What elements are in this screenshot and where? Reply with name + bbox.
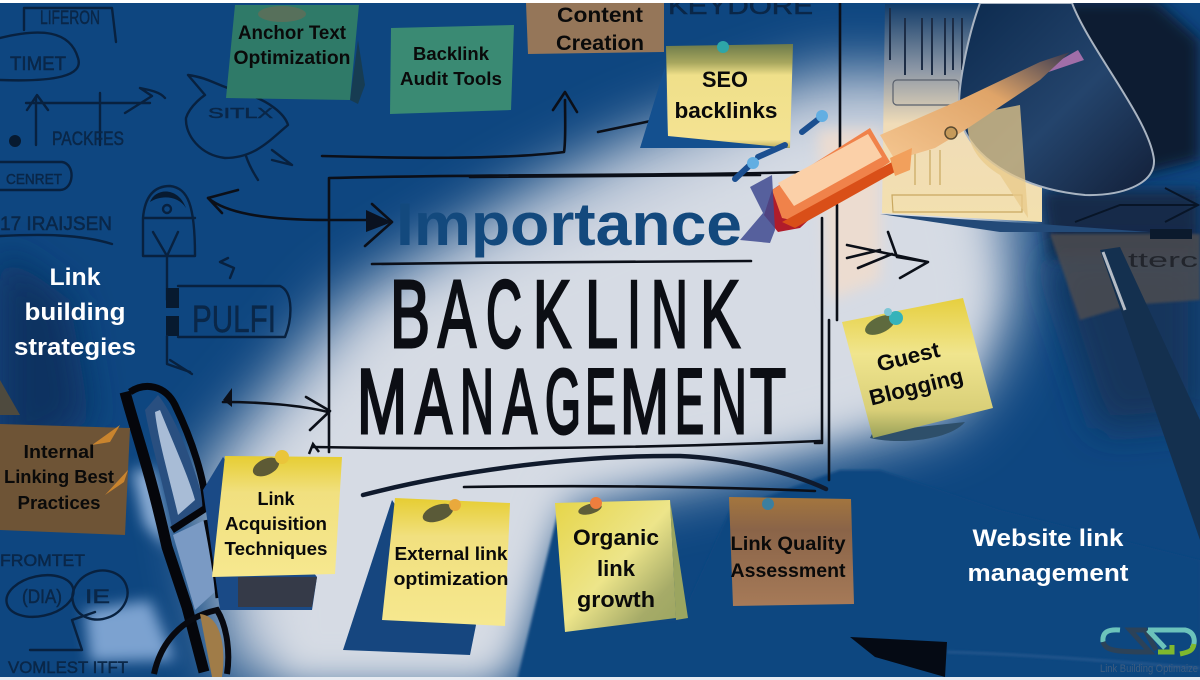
hand-lettered heading: MANAGEMENT: M: [620, 351, 669, 453]
sticky note: Guest Blogging: Guest: [874, 337, 943, 377]
hand-lettered heading: BACKLINK: A: [438, 261, 476, 368]
sticky note: External link optimization: optimization: [394, 569, 508, 589]
heading: Link building strategies: building: [24, 299, 126, 326]
sticky note: Backlink Audit Tools: Backlink: [413, 44, 490, 64]
sticky note: Link Quality Assessment: Assessment: [730, 561, 846, 582]
sketch arrow to frame from lock: [208, 190, 392, 246]
hand-lettered heading: MANAGEMENT: M: [357, 351, 407, 453]
sketch label: analysis: 17 IRAIJSEN: [0, 214, 112, 235]
hand-lettered heading: BACKLINK: B: [390, 261, 430, 368]
hand-lettered heading: MANAGEMENT: N: [460, 351, 494, 453]
heading: Link building strategies: [14, 264, 136, 361]
hand-lettered heading: MANAGEMENT: E: [675, 351, 704, 453]
sketch arrow from glasses to frame: [223, 388, 330, 430]
sticky note: Guest Blogging: Blogging: [867, 363, 966, 410]
sticky note: External link optimization: [343, 498, 510, 655]
main frame around title: [309, 172, 826, 495]
sticky note: Guest Blogging: [842, 298, 993, 441]
sketch: padlock: [143, 186, 195, 300]
sketch label: timet bubble: TIMET: [10, 54, 66, 75]
sticky note: Organic link growth: link: [597, 556, 636, 581]
sketch arrow: right side: [847, 232, 928, 278]
sticky note: Backlink Audit Tools: Audit Tools: [400, 69, 502, 89]
sticky note: Content Creation: Content: [557, 4, 643, 27]
sticky note: SEO backlinks: [640, 41, 793, 148]
hand-lettered heading: MANAGEMENT: T: [750, 351, 786, 453]
pen and brown paper, right side: [1050, 188, 1200, 540]
sticky note: Link Acquisition Techniques: Link: [258, 489, 295, 509]
heading: Website link management: management: [968, 560, 1129, 587]
sketch: lower-left bubbles and labels: [0, 551, 135, 677]
sticky note: SEO backlinks: backlinks: [674, 98, 778, 123]
pen and brown paper, right side: tterc: [1128, 250, 1198, 272]
orange marker: [740, 128, 912, 243]
sticky note: Internal Linking Best Practices: Internal: [24, 442, 94, 462]
hand-lettered heading: MANAGEMENT: A: [503, 351, 537, 453]
sticky note: Link Acquisition Techniques: Acquisition: [225, 514, 327, 534]
sketch: lower-left bubbles and labels: VOMLEST ITFT: [8, 658, 128, 677]
sketch arrows and process label: [9, 88, 165, 150]
push pins: blue: [735, 110, 828, 179]
sticky note: Link Quality Assessment: [729, 497, 854, 606]
paper under magnifier: [880, 4, 1150, 232]
sketch arrow: upward: [322, 92, 577, 158]
sticky note: Internal Linking Best Practices: Linking Best: [4, 467, 114, 487]
sketch label: analysis: [0, 214, 112, 244]
sketch label: lineron box: LIFERON: [40, 8, 100, 29]
sketch label: lineron box: [24, 8, 116, 42]
sketch: lower-left bubbles and labels: (DIA): [22, 587, 62, 608]
sketch: lower-left bubbles and labels: FROMTET: [0, 551, 85, 570]
hand-lettered heading: MANAGEMENT: [357, 351, 786, 453]
heading: Website link management: Website link: [972, 525, 1124, 552]
hand-lettered heading: BACKLINK: L: [585, 261, 618, 368]
sketch arrows and process label: PACKFES: [52, 129, 124, 150]
sketch: pulfi box: [166, 258, 290, 374]
hand-lettered heading: BACKLINK: K: [533, 261, 571, 368]
reading glasses: [125, 386, 228, 677]
sticky note: Backlink Audit Tools: [390, 25, 514, 114]
hand-lettered heading: MANAGEMENT: N: [711, 351, 747, 453]
sticky note: Organic link growth: [555, 497, 688, 632]
sticky note: Content Creation: [526, 3, 664, 55]
sticky note: Link Acquisition Techniques: Techniques: [224, 539, 328, 559]
sticky note: Content Creation: Creation: [556, 32, 644, 55]
hand-lettered heading: BACKLINK: N: [651, 261, 688, 368]
sticky note: External link optimization: External link: [394, 544, 509, 564]
hand-lettered heading: BACKLINK: I: [627, 261, 641, 368]
hand-lettered heading: MANAGEMENT: G: [545, 351, 581, 453]
logo: Link Building Optimaize: [1100, 630, 1198, 675]
sticky note: Organic link growth: Organic: [573, 525, 659, 550]
sticky note: Internal Linking Best Practices: [0, 380, 130, 535]
hand-drawn sketch elements, left side: [0, 0, 928, 677]
vertical lines beside frame: [829, 2, 840, 480]
hand-lettered heading: MANAGEMENT: E: [585, 351, 616, 453]
hand-lettered heading: BACKLINK: C: [486, 261, 522, 368]
hand-lettered heading: BACKLINK: K: [700, 261, 740, 368]
magnifying glass: [880, 3, 1154, 218]
sticky note: Internal Linking Best Practices: Practices: [18, 493, 100, 513]
black marker tip at bottom: [850, 637, 947, 677]
sketch label: timet bubble: [0, 33, 79, 80]
sticky note: Anchor Text Optimization: Anchor Text: [238, 23, 347, 44]
sketch label: content bubble: [0, 162, 72, 190]
sticky note: Anchor Text Optimization: [226, 5, 365, 104]
heading: Website link management: [968, 525, 1129, 587]
sticky note: SEO backlinks: SEO: [702, 67, 748, 92]
title: Importance: Importance: [396, 191, 742, 258]
line into SEO note: [598, 118, 665, 132]
sticky note: Link Quality Assessment: Link Quality: [730, 534, 846, 555]
sketch label: content bubble: CENRET: [6, 171, 62, 188]
sketch: heart bubble: [186, 75, 292, 180]
sketch: heart bubble: SITLX: [208, 105, 273, 122]
hand-lettered heading: MANAGEMENT: A: [415, 351, 452, 453]
sticky note: Anchor Text Optimization: Optimization: [234, 48, 350, 69]
hand-lettered heading: BACKLINK: [390, 261, 740, 368]
sketch: lower-left bubbles and labels: IE: [85, 587, 110, 608]
sketch: pulfi box: PULFI: [192, 299, 276, 341]
heading: Link building strategies: Link: [50, 264, 101, 291]
sticky note: Organic link growth: growth: [577, 587, 655, 612]
heading: Link building strategies: strategies: [14, 334, 136, 361]
sticky note: Link Acquisition Techniques: [203, 450, 342, 610]
